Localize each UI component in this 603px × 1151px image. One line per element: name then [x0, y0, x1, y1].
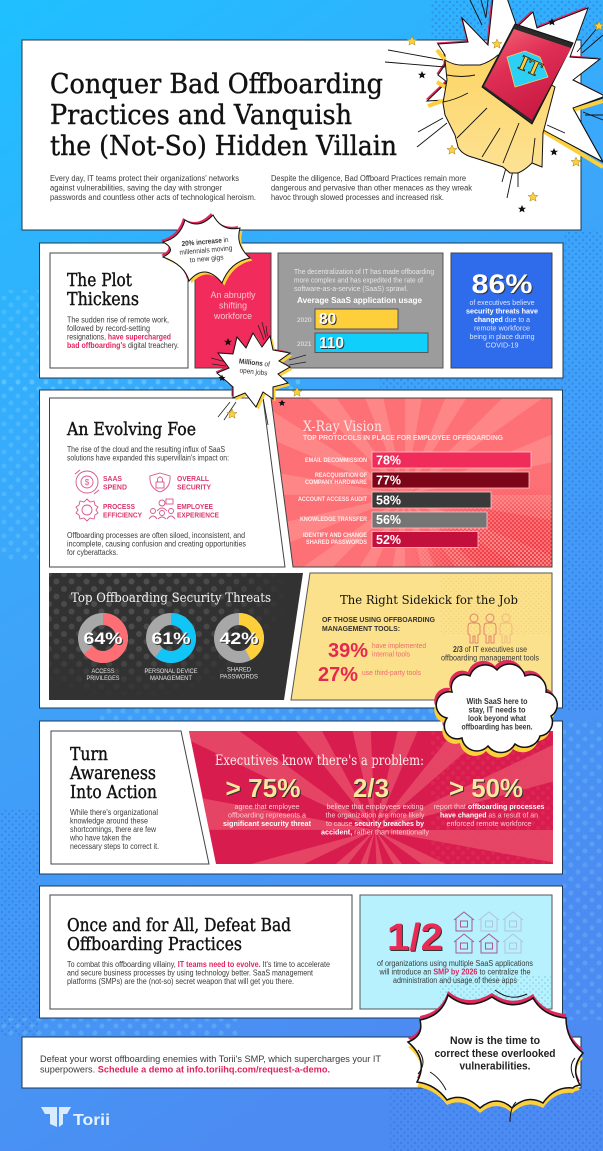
- cyan panel: 1/2: of organizations using multiple SaaS applications: [377, 959, 533, 968]
- awareness text panel: Into Action: [70, 783, 157, 803]
- gray panel: SaaS usage chart: [278, 253, 443, 368]
- stat: over 75%: [223, 773, 312, 828]
- bar chart: protocols: IDENTIFY AND CHANGE: [303, 533, 367, 539]
- bar chart: protocols: 77%: [376, 474, 401, 488]
- top threats panel: Top Offboarding Security Threats: [71, 591, 271, 606]
- stat 39%: internal tools: [372, 650, 410, 658]
- blue panel: 86%: COVID-19: [486, 340, 518, 350]
- stars: [407, 21, 603, 201]
- label: overall security: SECURITY: [177, 482, 211, 492]
- icon: houses: [454, 912, 523, 953]
- cape: [443, 55, 555, 173]
- callout cloud: SaaS here to stay: look beyond what: [468, 714, 526, 723]
- label: process efficiency: EFFICIENCY: [103, 510, 142, 520]
- callout burst: now is the time: [408, 990, 583, 1122]
- stat: 2/3: the organization are more likely: [326, 810, 425, 820]
- blue panel: 86%: 86%: [472, 269, 532, 299]
- donut: shared passwords: PASSWORDS: [220, 674, 258, 680]
- evolving foe panel: for cyberattacks.: [67, 548, 118, 557]
- stat: 2/3: to cause security breaches by: [326, 819, 425, 828]
- callout burst: now is the time: correct these overlooked: [434, 1048, 556, 1060]
- evolving foe panel: Offboarding processes are often siloed, inconsistent, and: [67, 531, 245, 540]
- label: employee experience: [177, 502, 219, 520]
- callout cloud: SaaS here to stay: [434, 660, 557, 757]
- donut: shared passwords: 42%: [220, 630, 259, 648]
- callout burst: 20% increase: 20% increase in: [181, 235, 229, 248]
- callout cloud: SaaS here to stay: With SaaS here to: [466, 697, 528, 706]
- intro text right: Despite the diligence, Bad Offboard Practices remain more: [271, 174, 466, 183]
- blue panel: 86%: changed due to a: [474, 315, 531, 324]
- bar chart: protocols: REACQUISITION OF: [315, 473, 367, 479]
- donut: access privileges: PRIVILEGES: [86, 675, 120, 682]
- awareness text panel: Awareness: [69, 764, 156, 784]
- intro text left: [50, 174, 256, 202]
- stat: 2/3: believe that employees exiting: [326, 802, 424, 811]
- red panel: shifting workforce: [195, 253, 271, 368]
- evolving foe panel: solutions have expanded this supervillain's impact on:: [67, 454, 229, 462]
- gray panel: SaaS usage chart: more complex and has expedited the rate of: [294, 276, 424, 284]
- blue panel: 86%: being in place during: [470, 332, 534, 341]
- red panel: shifting workforce: shifting: [219, 300, 247, 312]
- top threats panel: [49, 573, 303, 700]
- hero illustration: tablet superhero: [385, 0, 603, 212]
- stat 27%: 27%: [318, 664, 358, 686]
- accent stars: [218, 338, 302, 418]
- gray panel: SaaS usage chart: 80: [319, 311, 336, 328]
- plot text panel: bad offboarding's digital treachery.: [67, 341, 179, 350]
- logo: Torii: Torii: [73, 1112, 110, 1129]
- plot text panel: resignations, have supercharged: [67, 332, 171, 342]
- label: employee experience: EMPLOYEE: [177, 502, 213, 511]
- donut: shared passwords: SHARED: [227, 666, 251, 674]
- evolving foe panel: incomplete, causing confusion and creating opportunities: [67, 540, 246, 548]
- bar chart: protocols: ACCOUNT ACCESS AUDIT: [298, 497, 367, 503]
- plot text panel: followed by record-setting: [67, 324, 150, 333]
- panel: evolving foe and x-ray section: [39, 390, 563, 708]
- donut: personal device management: MANAGEMENT: [150, 675, 192, 682]
- callout burst: millions of open jobs: Millions of: [239, 356, 270, 369]
- icon: saas spend: $: [85, 478, 90, 487]
- stat: over 75%: significant security threat: [223, 819, 312, 828]
- bar chart: protocols: 56%: [376, 513, 401, 527]
- awareness text panel: necessary steps to correct it.: [70, 842, 159, 851]
- stat 27%: use third-party tools: [362, 668, 421, 677]
- intro text left: passwords and countless other acts of technological heroism.: [50, 193, 256, 202]
- cyan panel: 1/2: administration and usage of these apps: [393, 976, 517, 985]
- intro text left: against vulnerabilities, saving the day with stronger: [50, 184, 222, 192]
- gray panel: SaaS usage chart: 2020: [297, 317, 312, 324]
- defeat text panel: and secure business processes by using technology better. SaaS management: [67, 968, 314, 978]
- gray panel: SaaS usage chart: The decentralization of IT has made offboarding: [294, 267, 434, 276]
- blue panel: 86%: remote workforce: [474, 324, 530, 332]
- plot text panel: The sudden rise of remote work,: [67, 316, 169, 324]
- awareness text panel: [51, 731, 209, 864]
- bar chart: protocols: COMPANY HARDWARE: [305, 480, 367, 486]
- starburst: [426, 0, 603, 167]
- cyan panel: 1/2: [360, 895, 552, 1009]
- executives red panel: Executives know there's a problem:: [215, 753, 424, 769]
- speed lines: [385, 0, 603, 198]
- stat: 2/3: 2/3: [353, 773, 389, 803]
- icon: saas spend: [75, 470, 99, 494]
- icon: overall security: [150, 473, 170, 492]
- red panel: shifting workforce: workforce: [213, 311, 252, 322]
- evolving foe panel: An Evolving Foe: [66, 419, 196, 440]
- stat 27%: [318, 664, 421, 686]
- label: overall security: OVERALL: [177, 474, 209, 483]
- label: overall security: [177, 474, 211, 492]
- gray panel: SaaS usage chart: Average SaaS application usage: [297, 295, 422, 305]
- defeat text panel: Offboarding Practices: [67, 935, 242, 955]
- callout burst: now is the time: vulnerabilities.: [460, 1060, 530, 1072]
- panel: turn awareness into action: [39, 720, 563, 874]
- tablet: [482, 24, 573, 124]
- stat 39%: [328, 640, 426, 662]
- title: [50, 69, 397, 162]
- donut: access privileges: [84, 619, 123, 682]
- cyan panel: 1/2: 1/2: [387, 917, 443, 959]
- bar chart: protocols: [298, 452, 531, 548]
- x-ray vision panel: TOP PROTOCOLS IN PLACE FOR EMPLOYEE OFFBOARDING: [303, 435, 504, 442]
- gray panel: SaaS usage chart: 2021: [297, 341, 312, 348]
- x-ray vision panel: [270, 398, 552, 568]
- callout burst: millions of open jobs: open jobs: [239, 366, 268, 377]
- stat: 2/3: accident, rather than intentionally: [321, 828, 429, 836]
- stat: over 50%: [434, 773, 544, 828]
- right sidekick panel: The Right Sidekick for the Job: [340, 592, 518, 607]
- bar chart: protocols: 78%: [376, 454, 401, 468]
- cape fold lines: [443, 75, 535, 163]
- stat: over 50%: enforced remote workforce: [446, 819, 532, 828]
- right sidekick panel: offboarding management tools: [441, 654, 539, 662]
- stat: 2/3: [321, 773, 429, 836]
- stat: over 50%: > 50%: [449, 773, 523, 803]
- callout burst: 20% increase: to new gigs: [189, 252, 224, 264]
- plot text panel: The Plot: [67, 271, 132, 291]
- stat: over 75%: agree that employee: [234, 802, 300, 811]
- donut: access privileges: ACCESS: [92, 668, 114, 675]
- donut: personal device management: [144, 619, 198, 682]
- red panel: shifting workforce: An abruptly: [210, 290, 256, 301]
- donut: personal device management: 61%: [152, 630, 191, 648]
- title: the (Not-So) Hidden Villain: [50, 131, 397, 162]
- panel: the plot thickens: [40, 243, 563, 378]
- defeat text panel: Once and for All, Defeat Bad: [67, 916, 291, 936]
- defeat text panel: To combat this offboarding villainy, IT teams need to evolve. It's time to accelerate: [67, 960, 330, 969]
- title: Conquer Bad Offboarding: [50, 69, 383, 100]
- intro text right: [271, 174, 472, 202]
- bar chart: protocols: 52%: [376, 533, 401, 547]
- icon: process efficiency: [76, 499, 98, 521]
- logo: Torii: [41, 1107, 110, 1129]
- x-ray vision panel: X-Ray Vision: [303, 419, 382, 435]
- label: saas spend: [103, 474, 127, 492]
- callout cloud: SaaS here to stay: offboarding has been.: [462, 722, 532, 732]
- blue panel: 86%: [451, 253, 552, 368]
- awareness text panel: who have taken the: [69, 834, 131, 842]
- stat: over 50%: have changed as a result of an: [440, 810, 538, 820]
- gray panel: SaaS usage chart: 110: [319, 335, 344, 352]
- bar chart: protocols: SHARED PASSWORDS: [306, 540, 367, 546]
- callout burst: 20% increase: [161, 213, 252, 286]
- callout burst: now is the time: Now is the time to: [450, 1035, 540, 1047]
- label: process efficiency: PROCESS: [103, 502, 135, 511]
- awareness text panel: Turn: [70, 745, 108, 765]
- panel: defeat bad offboarding: [40, 886, 562, 1018]
- call to action strip: [22, 1037, 581, 1088]
- icon: people two of three: [468, 614, 512, 643]
- stat: over 75%: offboarding represents a: [228, 810, 307, 820]
- callout burst: millions of open jobs: [211, 322, 306, 425]
- awareness text panel: knowledge around these: [70, 816, 148, 826]
- donut: shared passwords: [220, 619, 259, 680]
- stat: over 75%: > 75%: [226, 773, 300, 803]
- awareness text panel: While there's organizational: [70, 808, 158, 817]
- stat 39%: have implemented: [372, 641, 426, 650]
- defeat text panel: [50, 895, 352, 1009]
- awareness text panel: shortcomings, there are few: [70, 825, 156, 834]
- label: saas spend: SPEND: [103, 482, 127, 492]
- blue panel: 86%: of executives believe: [470, 298, 534, 307]
- bar chart: protocols: 58%: [376, 494, 401, 508]
- blue panel: 86%: security threats have: [466, 306, 538, 316]
- callout burst: 20% increase: millennials moving: [179, 243, 233, 257]
- cyan panel: 1/2: will introduce an SMP by 2026 to centralize the: [379, 968, 530, 976]
- right sidekick panel: [291, 573, 552, 700]
- donut: personal device management: PERSONAL DEVICE: [144, 668, 198, 675]
- emblem IT: IT: [515, 52, 545, 82]
- donut: access privileges: 64%: [84, 630, 123, 648]
- intro text right: dangerous and pervasive than other menaces as they wreak: [271, 184, 472, 192]
- stat: over 50%: report that offboarding processes: [434, 802, 544, 811]
- plot text panel: Thickens: [67, 290, 139, 310]
- right sidekick panel: 2/3 of IT executives use: [453, 645, 527, 654]
- right sidekick panel: OF THOSE USING OFFBOARDING: [322, 615, 435, 624]
- bar chart: protocols: KNOWLEDGE TRANSFER: [300, 517, 368, 523]
- call to action strip: superpowers. Schedule a demo at info.toriihq.com/request-a-demo.: [40, 1064, 330, 1074]
- stat 39%: 39%: [328, 640, 368, 662]
- intro text left: Every day, IT teams protect their organizations' networks: [50, 174, 239, 183]
- call to action strip: Defeat your worst offboarding enemies with Torii's SMP, which supercharges your IT: [40, 1054, 381, 1064]
- label: employee experience: EXPERIENCE: [177, 510, 219, 520]
- intro text right: havoc through slowed processes and increased risk.: [271, 193, 444, 202]
- icon: employee experience: [149, 499, 175, 519]
- executives red panel: [189, 731, 553, 864]
- callout cloud: SaaS here to stay: stay, IT needs to: [468, 706, 526, 714]
- evolving foe panel: The rise of the cloud and the resulting influx of SaaS: [67, 445, 225, 454]
- panel: header: [22, 40, 581, 230]
- label: process efficiency: [103, 502, 142, 520]
- gray panel: SaaS usage chart: software-as-a-service (SaaS) sprawl.: [294, 284, 408, 293]
- label: saas spend: SAAS: [103, 474, 122, 483]
- right sidekick panel: MANAGEMENT TOOLS:: [322, 624, 400, 633]
- title: Practices and Vanquish: [50, 100, 352, 131]
- evolving foe panel: [50, 398, 285, 567]
- plot text panel: [50, 253, 188, 368]
- defeat text panel: platforms (SMPs) are the (not-so) secret weapon that will get you there.: [67, 977, 294, 986]
- bar chart: protocols: EMAIL DECOMMISSION: [305, 458, 367, 464]
